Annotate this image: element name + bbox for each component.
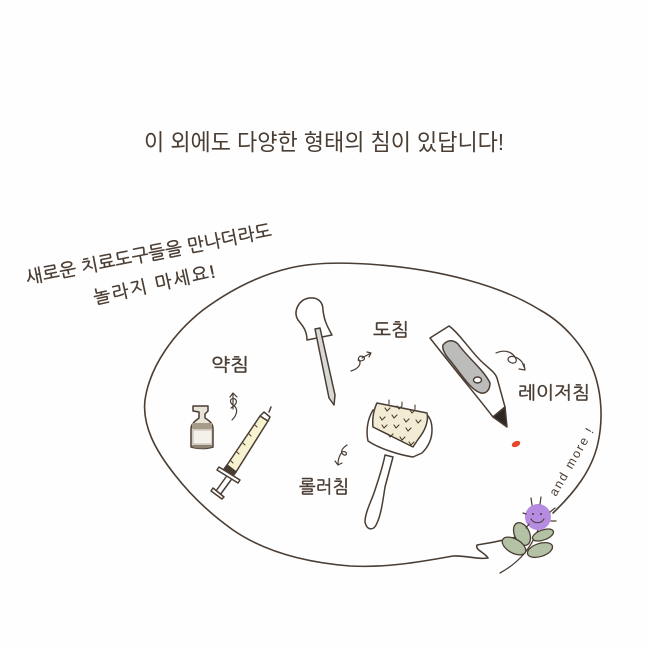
arrow: to 레이저침 [496, 351, 525, 370]
arrow: to 롤러침 [335, 445, 347, 465]
icon: syringe [211, 407, 271, 499]
label: 약침: 약침 [211, 355, 249, 375]
label: 롤러침: 롤러침 [299, 477, 349, 497]
icon: laser pen [430, 326, 507, 427]
icon: vial [191, 406, 213, 448]
arrow: to 도침 [351, 352, 371, 371]
handwritten note: 놀라지 마세요! [92, 262, 217, 308]
speech bubble [145, 263, 601, 566]
arrow: to 약침 [230, 393, 237, 420]
label: 레이저침: 레이저침 [518, 383, 590, 403]
label: 도침: 도침 [373, 320, 409, 340]
icon: hook needle [296, 298, 335, 405]
and more text: and more ! [546, 426, 597, 498]
icon: purple flower with leaves [499, 497, 556, 573]
icon: roller needle [365, 400, 432, 529]
title: 이 외에도 다양한 형태의 침이 있답니다! [144, 129, 504, 155]
handwritten note: 새로운 치료도구들을 만나더라도 [24, 221, 273, 288]
laser dot [511, 440, 521, 448]
